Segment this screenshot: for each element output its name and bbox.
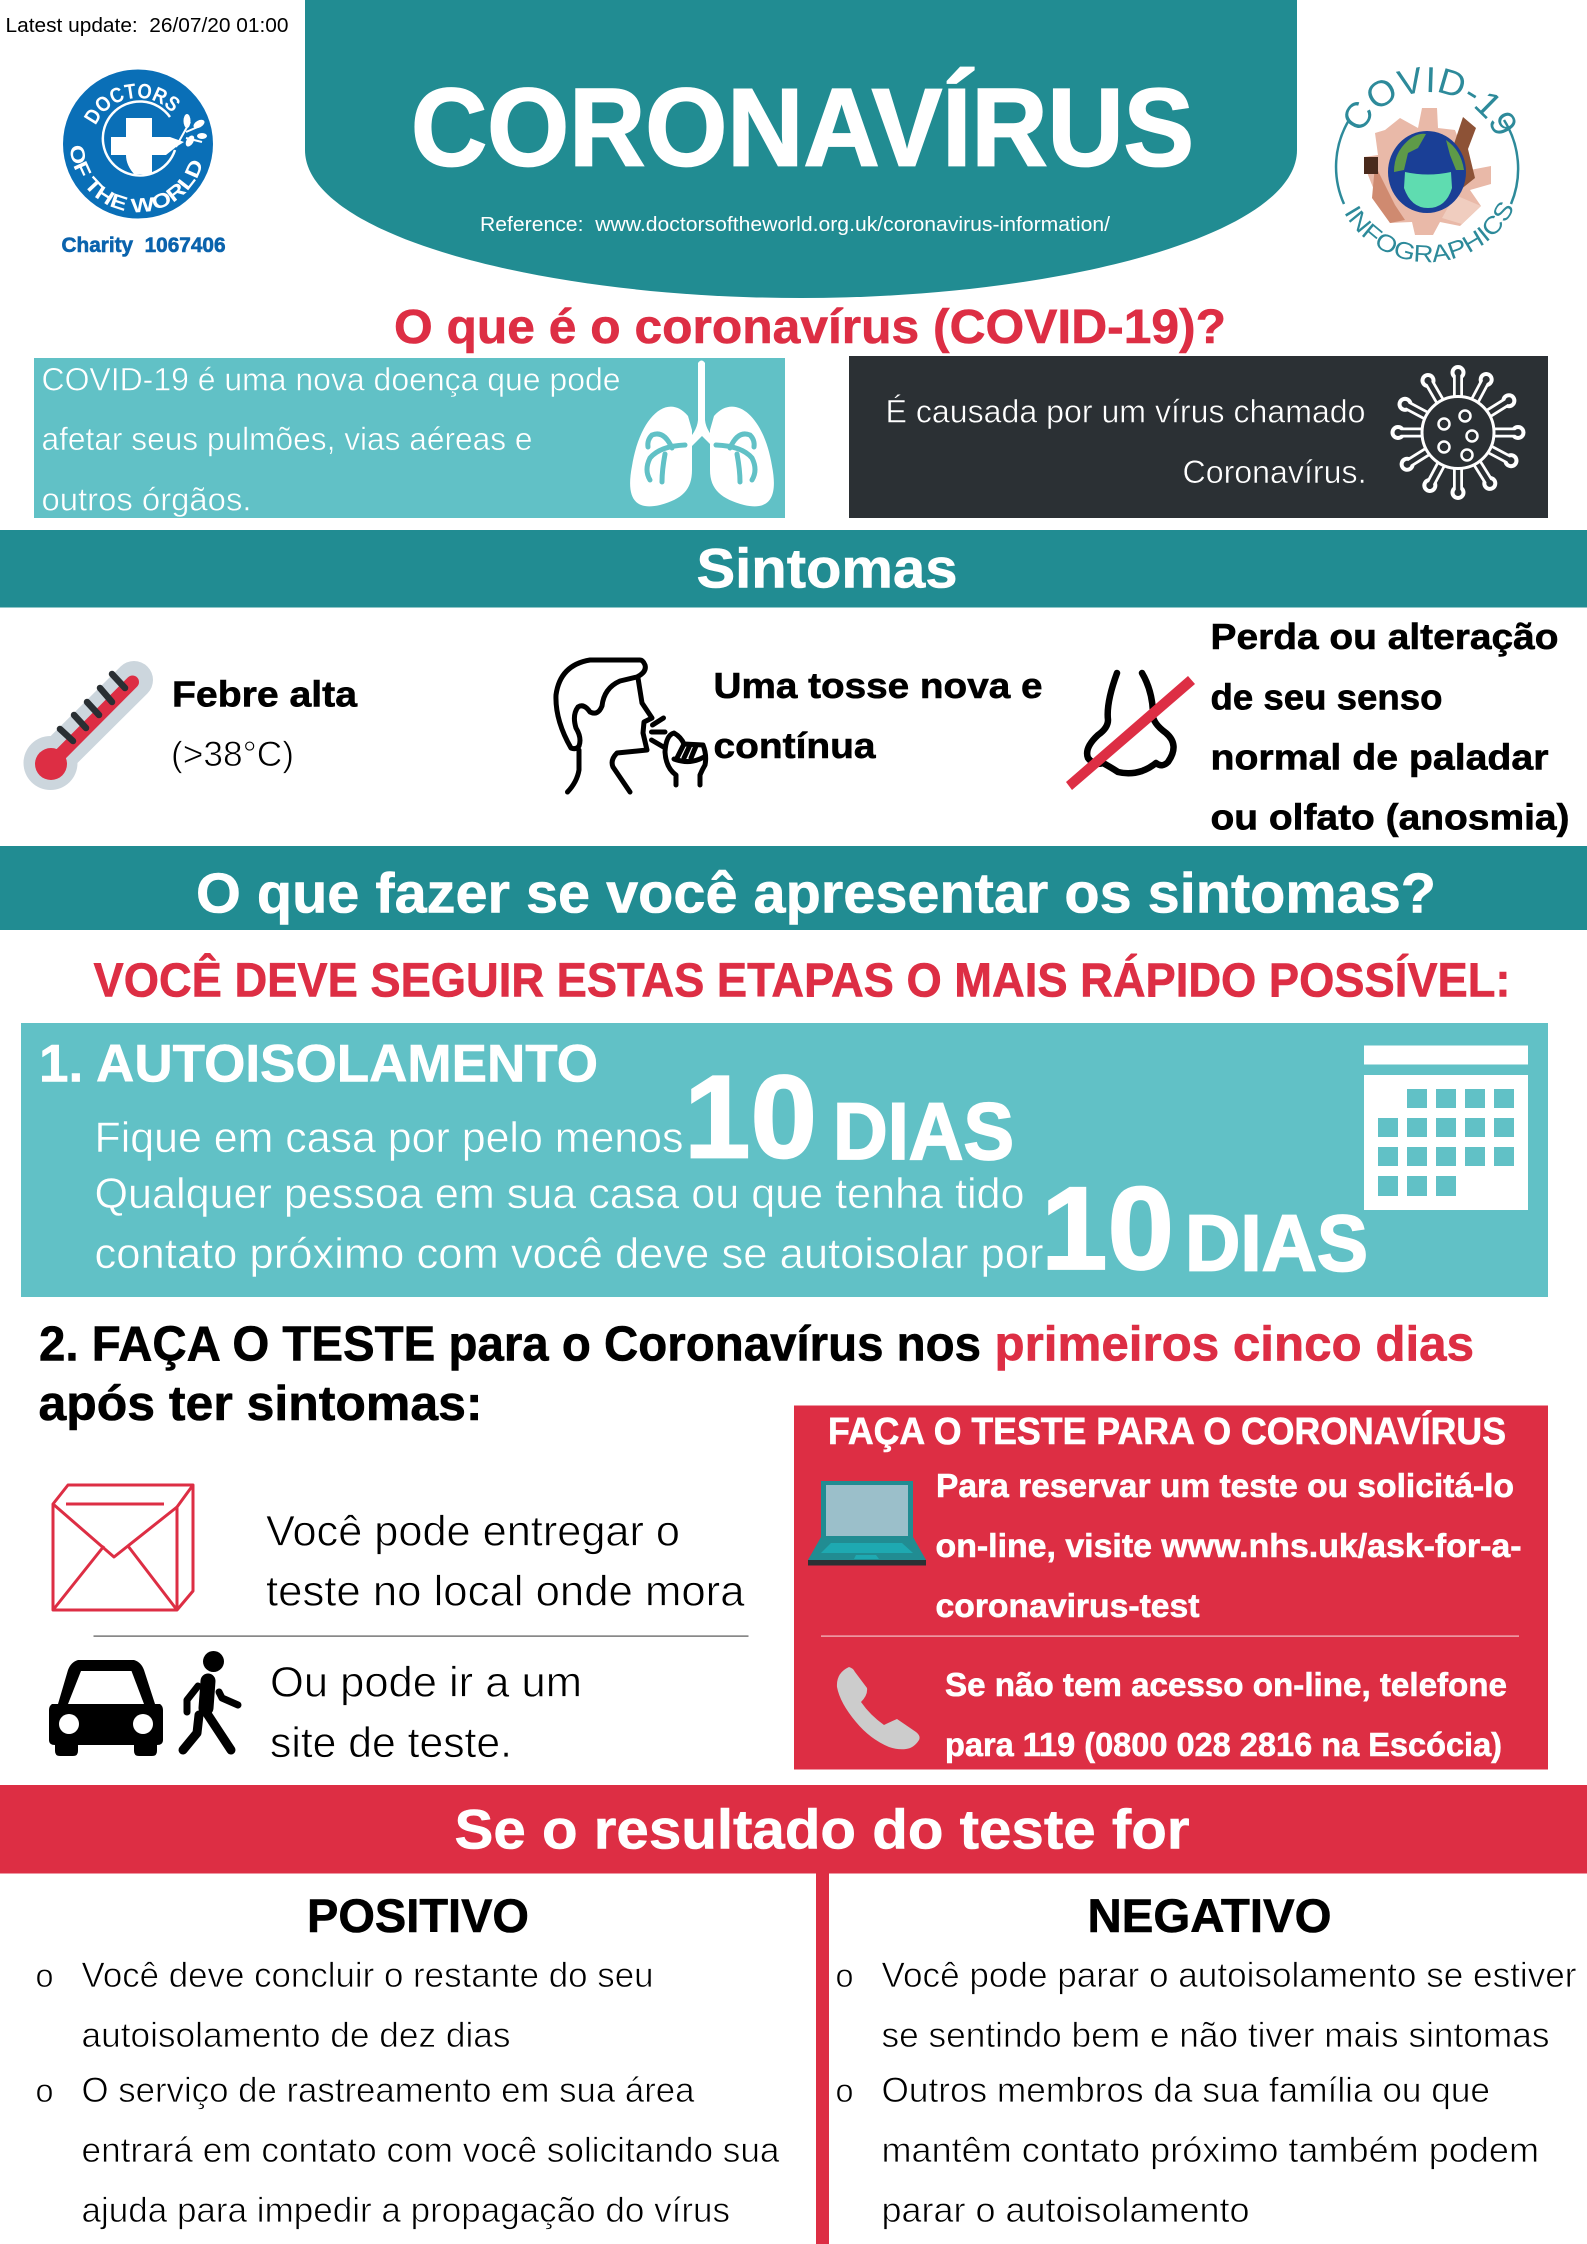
logo: COVID-19 infographics: [1334, 66, 1520, 262]
fever text: Febre alta: [172, 674, 358, 714]
symptom: fever: [24, 674, 358, 790]
heading: steps: VOCÊ DEVE SEGUIR ESTAS ETAPAS O MAIS RÁPIDO POSSÍVEL:: [94, 952, 1510, 1008]
negative bullets: o: [836, 1957, 854, 1994]
icon: lungs: [630, 360, 774, 506]
household text: contato próximo com você deve se autoisolar por: [94, 1230, 1044, 1278]
positive bullets: o: [36, 2072, 54, 2109]
test site text: Ou pode ir a um: [270, 1658, 582, 1706]
phone text: Se não tem acesso on-line, telefone: [945, 1666, 1507, 1703]
negative bullets: [836, 1956, 1577, 2230]
smell text: [1210, 616, 1570, 838]
description text: outros órgãos.: [42, 482, 252, 518]
charity number: Charity 1067406: [62, 234, 226, 257]
logo: COVID-19 infographics: COVID-19: [1345, 66, 1516, 134]
household text: [94, 1170, 1044, 1278]
cause text: [886, 394, 1366, 490]
symptom: fever: (>38°C): [171, 735, 294, 774]
smell text: de seu senso: [1210, 676, 1442, 718]
online booking text: Para reservar um teste ou solicitá-lo: [936, 1467, 1514, 1504]
delivery text: teste no local onde mora: [266, 1568, 745, 1616]
symptom: cough: [556, 660, 1042, 792]
icon: envelope: [53, 1485, 193, 1610]
section bar: symptoms: [0, 530, 1587, 608]
panel: virus cause: [849, 356, 1548, 518]
10 days callout household: 10: [1041, 1163, 1174, 1295]
10 days callout household: DIAS: [1185, 1198, 1368, 1288]
household text: Qualquer pessoa em sua casa ou que tenha tido: [94, 1170, 1024, 1218]
panel: COVID-19 description: [34, 358, 785, 518]
cause text: É causada por um vírus chamado: [886, 394, 1366, 430]
section bar: what to do: [0, 846, 1587, 930]
icon: crossed-out nose: [1066, 673, 1195, 790]
smell text: ou olfato (anosmia): [1210, 796, 1570, 838]
icon: walking person: [183, 1651, 238, 1750]
logo: Doctors of the World: DOCTORS: [84, 84, 180, 124]
header banner: [305, 0, 1297, 298]
positive heading: POSITIVO: [307, 1889, 529, 1942]
icon: laptop: [808, 1481, 926, 1566]
online booking text: on-line, visite www.nhs.uk/ask-for-a-: [936, 1527, 1522, 1564]
online booking text: [936, 1467, 1522, 1624]
reference link: Reference: www.doctorsoftheworld.org.uk/coronavirus-information/: [480, 214, 1110, 236]
column divider: [816, 1873, 829, 2244]
negative bullets: Outros membros da sua família ou que: [882, 2071, 1490, 2110]
symptom: loss of smell: [1066, 616, 1570, 838]
latest update note: Latest update: 26/07/20 01:00: [6, 15, 288, 37]
heading: step 2 test: primeiros cinco dias: [994, 1318, 1474, 1372]
description text: COVID-19 é uma nova doença que pode: [42, 362, 620, 398]
icon: thermometer: [24, 674, 134, 790]
positive bullets: autoisolamento de dez dias: [82, 2016, 511, 2055]
positive bullets: ajuda para impedir a propagação do vírus: [82, 2191, 730, 2230]
section bar: test result: Se o resultado do teste for: [454, 1798, 1190, 1860]
step 1 heading: 1. AUTOISOLAMENTO: [39, 1034, 598, 1094]
negative bullets: o: [836, 2072, 854, 2109]
icon: coughing person: [556, 660, 706, 792]
panel: negative result: [836, 1889, 1577, 2230]
title: CORONAVÍRUS: [411, 66, 1194, 190]
delivery text: Você pode entregar o: [266, 1508, 680, 1556]
negative bullets: se sentindo bem e não tiver mais sintomas: [882, 2016, 1550, 2055]
section bar: what to do: O que fazer se você apresentar os sintomas?: [196, 862, 1436, 926]
positive bullets: entrará em contato com você solicitando sua: [82, 2131, 780, 2170]
description text: afetar seus pulmões, vias aéreas e: [42, 421, 532, 457]
panel: book a test: [794, 1406, 1548, 1770]
icon: virus: [1390, 365, 1526, 500]
heading: what is coronavirus: O que é o coronavírus (COVID-19)?: [394, 301, 1226, 354]
cough text: Uma tosse nova e: [714, 665, 1042, 706]
heading: step 2 test: [38, 1318, 1474, 1431]
online booking text: coronavirus-test: [936, 1587, 1200, 1624]
test site text: site de teste.: [270, 1719, 512, 1767]
10 days callout: 10: [684, 1052, 817, 1184]
negative heading: NEGATIVO: [1088, 1889, 1332, 1942]
section bar: test result: [0, 1785, 1587, 1874]
option: go to test site: [49, 1651, 582, 1767]
10 days callout: DIAS: [833, 1087, 1014, 1177]
negative bullets: parar o autoisolamento: [882, 2191, 1250, 2230]
panel: positive result: [36, 1889, 780, 2230]
panel: step 1 self-isolation: [21, 1023, 1548, 1297]
test site text: [270, 1658, 582, 1767]
heading: step 2 test: 2. FAÇA O TESTE para o Coronavírus nos: [39, 1318, 981, 1372]
panel heading: FAÇA O TESTE PARA O CORONAVÍRUS: [828, 1409, 1506, 1453]
negative bullets: mantêm contato próximo também podem: [882, 2131, 1539, 2170]
logo: COVID-19 infographics: INFOGRAPHICS: [1345, 202, 1512, 262]
smell text: normal de paladar: [1210, 736, 1548, 778]
positive bullets: O serviço de rastreamento em sua área: [82, 2071, 695, 2110]
logo: Doctors of the World: OF THE WORLD: [70, 146, 202, 212]
icon: phone: [837, 1667, 920, 1749]
stay at home text: Fique em casa por pelo menos: [94, 1114, 684, 1162]
icon: calendar: [1364, 1046, 1528, 1210]
negative bullets: Você pode parar o autoisolamento se estiver: [882, 1956, 1577, 1995]
positive bullets: [36, 1956, 780, 2230]
phone text: [945, 1666, 1507, 1763]
heading: step 2 test: após ter sintomas:: [38, 1377, 482, 1431]
symptom: cough: contínua: [714, 725, 877, 766]
smell text: Perda ou alteração: [1210, 616, 1558, 657]
cause text: Coronavírus.: [1182, 454, 1366, 490]
10 days callout household: [1041, 1163, 1368, 1295]
option: deliver the test: [53, 1485, 745, 1616]
section bar: symptoms: Sintomas: [696, 536, 958, 600]
icon: car: [49, 1660, 163, 1756]
positive bullets: o: [36, 1957, 54, 1994]
description text: [42, 362, 620, 518]
delivery text: [266, 1508, 745, 1616]
positive bullets: Você deve concluir o restante do seu: [82, 1956, 654, 1995]
phone text: para 119 (0800 028 2816 na Escócia): [945, 1726, 1502, 1763]
logo: Doctors of the World: [63, 70, 213, 218]
10 days callout: [684, 1052, 1014, 1184]
